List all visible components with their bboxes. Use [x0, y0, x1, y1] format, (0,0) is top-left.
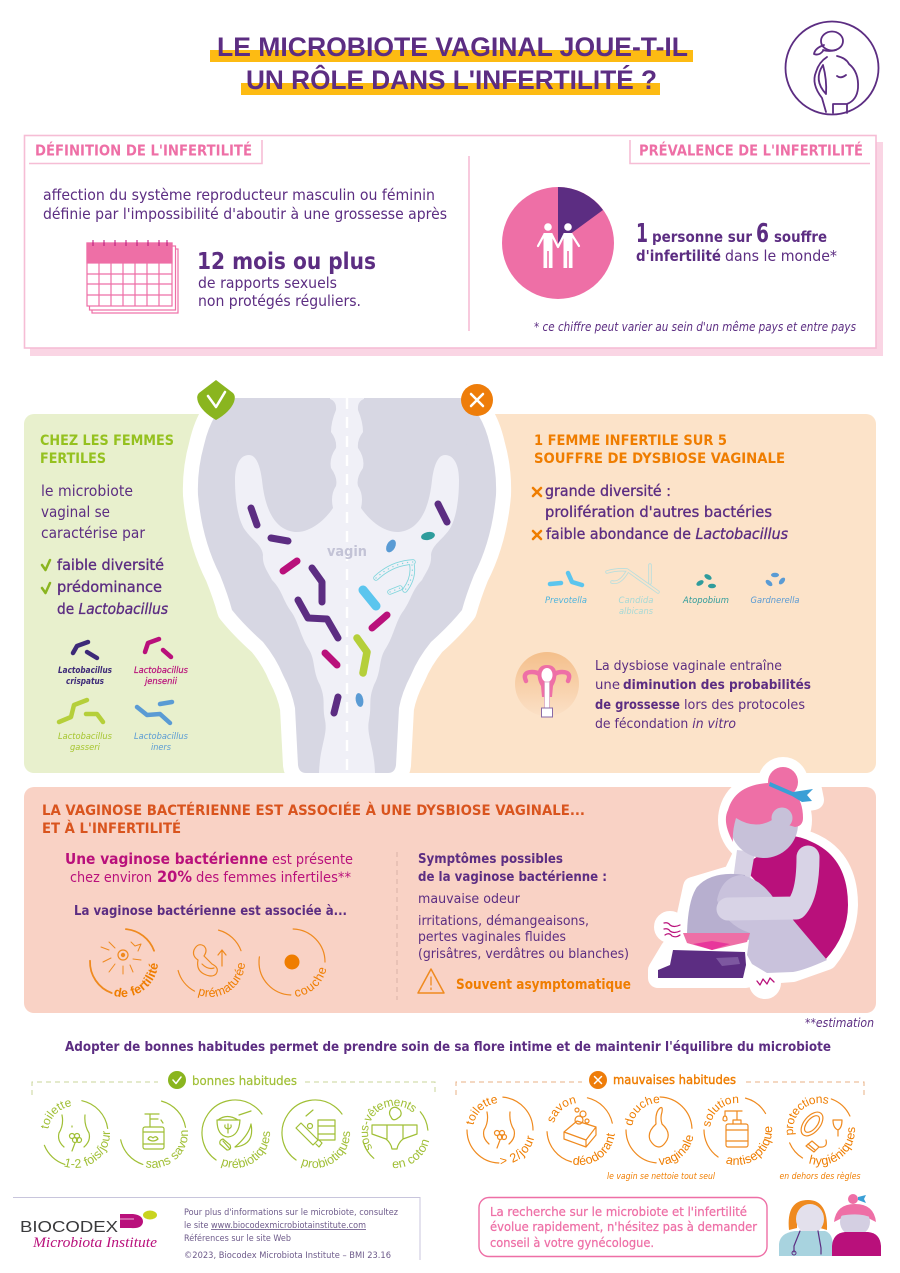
habit: prébiotiques: prébiotiques: [220, 1132, 270, 1168]
legend: crispatus: Lactobacillus: [58, 666, 112, 676]
legend: gardnerella: [750, 573, 800, 606]
bacteria inside: [251, 504, 447, 713]
habit: toilette plus de 2 fois par jour: toilette: [466, 1097, 498, 1124]
habit: protections hygiéniques: [786, 1096, 856, 1168]
habit: savon déodorant: déodorant: [573, 1133, 615, 1166]
dysbiosis consequence: [595, 658, 811, 732]
references text: le site www.biocodexmicrobiotainstitute.com: [184, 1221, 366, 1231]
panel: definition and prevalence: [24, 136, 883, 356]
prevalence statement: chez environ: [70, 870, 152, 886]
habit: savon déodorant: [546, 1097, 615, 1166]
heading: habits: Adopter de bonnes habitudes permet de prendre soin de sa flore intime et de maintenir l'équilibre du microbiote: [65, 1040, 831, 1055]
cross list: prolifération d'autres bactéries: [545, 503, 772, 521]
dysbiosis consequence: diminution des probabilités: [623, 677, 811, 693]
asymptomatic note: Souvent asymptomatique: [456, 977, 631, 993]
panel: bacterial vaginosis: [24, 787, 876, 1013]
prevalence statement: 20%: [157, 867, 192, 886]
panel text: fertile women: [40, 433, 189, 753]
legend: prevotella: [545, 573, 587, 606]
icon: warning: [418, 969, 444, 993]
symptoms: (grisâtres, verdâtres ou blanches): [418, 947, 629, 962]
legend: candida albicans: [607, 565, 658, 617]
icon: calendar: [87, 240, 178, 313]
prevalence statement: d'infertilité: [636, 247, 721, 265]
icon: naissance prématurée: prématurée: [198, 963, 245, 998]
key duration: de rapports sexuels: [198, 274, 337, 292]
callout: ask your gynecologist: conseil à votre gynécologue.: [490, 1236, 654, 1250]
logo: Biocodex Microbiota Institute: Microbiota Institute: [32, 1235, 157, 1251]
key duration: [197, 249, 376, 310]
heading: [40, 433, 174, 467]
habit: sous-vêtements en coton: sous-vêtements: [362, 1100, 416, 1150]
legend: candida albicans: Candida: [618, 596, 654, 606]
prevalence statement: des femmes infertiles**: [196, 870, 351, 886]
habit: toilette plus de 2 fois par jour: [466, 1096, 534, 1164]
habit: protections hygiéniques: protections: [786, 1096, 828, 1135]
legend: jensenii: Lactobacillus: [134, 666, 189, 676]
symptoms: pertes vaginales fluides: [418, 930, 566, 945]
doctor: [779, 1200, 833, 1256]
legend: candida albicans: albicans: [619, 607, 654, 617]
label: mauvaises habitudes: mauvaises habitudes: [613, 1073, 736, 1087]
legend: gasseri: gasseri: [70, 743, 101, 753]
references text: [184, 1208, 399, 1261]
intro text: le microbiote: [41, 482, 133, 500]
subheading: La vaginose bactérienne est associée à...: [74, 904, 347, 919]
legend: iners: [134, 702, 189, 753]
callout: ask your gynecologist: [479, 1198, 767, 1256]
checklist: [42, 556, 168, 618]
definition text: [43, 186, 447, 223]
habit: prébiotiques: [201, 1099, 270, 1168]
prevalence statement: 1: [636, 219, 648, 249]
habit: toilette plus de 2 fois par jour: > 2/jour: [500, 1136, 534, 1164]
body: [750, 836, 848, 960]
symptoms: [418, 852, 629, 962]
footnote: * ce chiffre peut varier au sein d'un même pays et entre pays: [534, 320, 856, 334]
prevalence statement: souffre: [774, 228, 827, 246]
legend: jensenii: [134, 639, 189, 687]
cross list: [533, 482, 788, 543]
legend: jensenii: jensenii: [144, 677, 178, 687]
icon: green check shield: [197, 380, 235, 420]
logo: Biocodex Microbiota Institute: [20, 1210, 157, 1251]
dysbiosis consequence: La dysbiose vaginale entraîne: [595, 658, 782, 674]
checklist: de Lactobacillus: [57, 600, 168, 618]
definition text: affection du système reproducteur masculin ou féminin: [43, 186, 435, 204]
illustration: woman with discomfort: [658, 767, 848, 989]
footer: logo and references: [13, 1198, 420, 1261]
habit: sans savon: sans savon: [146, 1130, 188, 1168]
illustration: doctor and patient: [779, 1194, 881, 1256]
habit: probiotiques: probiotiques: [300, 1132, 350, 1168]
intro text: vaginal se: [41, 503, 110, 521]
heading: prevalence: PRÉVALENCE DE L'INFERTILITÉ: [639, 140, 863, 160]
caption: protections: en dehors des règles: [780, 1171, 861, 1182]
habit: solution antiseptique: antiseptique: [726, 1126, 773, 1165]
definition text: définie par l'impossibilité d'aboutir à une grossesse après: [43, 205, 447, 223]
prevalence statement: [65, 850, 353, 886]
habit: douche vaginale: douche: [624, 1096, 660, 1126]
caption: douche: le vagin se nettoie tout seul: [607, 1172, 715, 1182]
habit: sous-vêtements en coton: [362, 1100, 430, 1168]
title: UN RÔLE DANS L'INFERTILITÉ ?: [246, 64, 657, 95]
prevalence statement: dans le monde*: [725, 247, 837, 265]
heading: SOUFFRE DE DYSBIOSE VAGINALE: [534, 451, 785, 467]
panel text: dysbiosis: [515, 433, 811, 732]
title: LE MICROBIOTE VAGINAL JOUE-T-IL: [217, 32, 688, 62]
habit: sans savon: [120, 1100, 188, 1168]
callout: ask your gynecologist: évolue rapidement, n'hésitez pas à demander: [490, 1220, 757, 1234]
references text: ©2023, Biocodex Microbiota Institute – BMI 23.16: [184, 1251, 391, 1261]
label: bonnes habitudes: bonnes habitudes: [192, 1074, 297, 1088]
cross list: faible abondance de Lactobacillus: [546, 525, 788, 543]
icon: orange cross: [461, 384, 493, 416]
icon: fausse couche: [258, 928, 326, 996]
icon: orange cross: [589, 1071, 607, 1089]
habit: solution antiseptique: solution: [704, 1096, 738, 1127]
legend: gardnerella: Gardnerella: [750, 596, 800, 606]
symptoms: irritations, démangeaisons,: [418, 914, 589, 929]
key duration: 12 mois ou plus: [197, 249, 376, 275]
heading: ET À L'INFERTILITÉ: [42, 820, 181, 837]
habit: douche vaginale: vaginale: [658, 1135, 694, 1165]
dysbiosis consequence: de grossesse: [595, 697, 680, 713]
habit: solution antiseptique: [703, 1096, 773, 1165]
underwear: [683, 933, 750, 950]
dysbiosis consequence: lors des protocoles: [684, 697, 805, 713]
legend: prevotella: Prevotella: [545, 596, 587, 606]
legend: crispatus: crispatus: [66, 677, 104, 687]
callout: ask your gynecologist: La recherche sur le microbiote et l'infertilité: [490, 1205, 747, 1219]
diagram: vagina with bacteria: [198, 398, 496, 773]
prevalence statement: est présente: [272, 852, 353, 868]
intro text: [41, 482, 146, 542]
footnote: estimation: **estimation: [805, 1016, 874, 1030]
icon: baisse de fertilité: de fertilité: [114, 963, 158, 998]
heading: [42, 802, 585, 837]
icon: fausse couche: couche: [295, 968, 326, 996]
head: [730, 790, 798, 858]
heading: CHEZ LES FEMMES: [40, 433, 174, 449]
patient: [832, 1194, 881, 1256]
habit: savon déodorant: savon: [548, 1097, 576, 1122]
habit: probiotiques: [281, 1099, 350, 1168]
legend: atopobium: [682, 573, 729, 606]
prevalence statement: personne sur: [652, 228, 753, 246]
habit: toilette 1-2 fois par jour: 1-2 fois/jour: [64, 1131, 110, 1168]
legend: crispatus: [58, 642, 112, 687]
heading: [534, 433, 785, 467]
icon: pregnant woman: [786, 22, 878, 114]
icon: baisse de fertilité: [89, 928, 158, 998]
prevalence statement: Une vaginose bactérienne: [65, 850, 268, 868]
symptoms: mauvaise odeur: [418, 892, 521, 907]
references text: Références sur le site Web: [184, 1233, 291, 1244]
icon: uterus with IVF catheter: [515, 652, 579, 717]
key duration: non protégés réguliers.: [198, 292, 361, 310]
symptoms: de la vaginose bactérienne :: [418, 870, 607, 885]
checklist: faible diversité: [57, 556, 164, 574]
heading: definition: DÉFINITION DE L'INFERTILITÉ: [35, 140, 252, 160]
legend: gasseri: Lactobacillus: [58, 732, 113, 742]
legend: atopobium: Atopobium: [682, 596, 729, 606]
bad habits section: [456, 1071, 864, 1182]
legend: iners: Lactobacillus: [134, 732, 189, 742]
label: vagin: vagin: [327, 544, 367, 560]
icon: naissance prématurée: [178, 930, 245, 998]
habit: toilette 1-2 fois par jour: [40, 1100, 110, 1168]
heading: 1 FEMME INFERTILE SUR 5: [534, 433, 727, 449]
habit: protections hygiéniques: hygiéniques: [809, 1127, 856, 1168]
panel: fertile women background: [24, 414, 324, 773]
prevalence statement: 6: [756, 219, 769, 249]
pie chart: 1 in 6: [502, 187, 614, 299]
legend: gasseri: [58, 700, 113, 753]
good habits section: [32, 1071, 436, 1168]
intro text: caractérise par: [41, 524, 146, 542]
dysbiosis consequence: de fécondation in vitro: [595, 716, 736, 732]
symptoms: Symptômes possibles: [418, 852, 563, 867]
heading: FERTILES: [40, 451, 106, 467]
heading: LA VAGINOSE BACTÉRIENNE EST ASSOCIÉE À UNE DYSBIOSE VAGINALE...: [42, 802, 585, 819]
references text: Pour plus d'informations sur le microbiote, consultez: [184, 1208, 399, 1218]
prevalence statement: [636, 219, 837, 265]
trousers: [658, 950, 746, 978]
habit: toilette 1-2 fois par jour: toilette: [40, 1100, 71, 1128]
title: [210, 32, 693, 95]
dysbiosis consequence: une: [595, 677, 620, 693]
icon: green check: [168, 1071, 186, 1089]
habit: douche vaginale: [624, 1096, 694, 1165]
habit: sous-vêtements en coton: en coton: [392, 1140, 430, 1168]
logo: Biocodex Microbiota Institute: BIOCODEX: [20, 1219, 118, 1236]
cross list: grande diversité :: [545, 482, 671, 500]
legend: iners: iners: [151, 743, 172, 753]
panel: dysbiosis background: [380, 414, 876, 773]
checklist: prédominance: [57, 578, 162, 596]
